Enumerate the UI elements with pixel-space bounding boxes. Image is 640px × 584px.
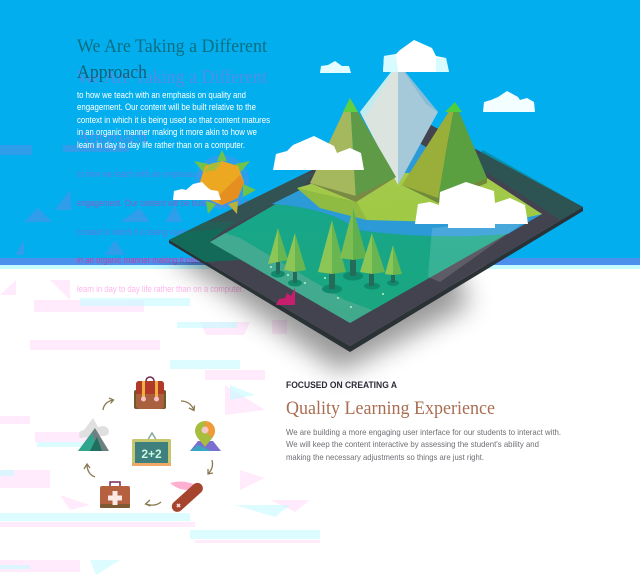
cloud: large bbox=[415, 182, 528, 228]
tablet screen bbox=[210, 132, 542, 323]
tree 5 bbox=[360, 233, 385, 290]
ghost heading and body text: in an organic manner making it more akin to how we bbox=[77, 255, 257, 265]
mountain: central peak bbox=[360, 63, 438, 185]
icon: map pin bbox=[190, 421, 221, 451]
ground island bbox=[297, 170, 542, 222]
section paragraph: making the necessary adjustments so things are just right. bbox=[286, 452, 484, 462]
ghost heading and body text: context in which it is being used so that content matures bbox=[77, 227, 270, 237]
section heading: Quality Learning Experience bbox=[286, 398, 495, 419]
ghost heading and body text: to how we teach with an emphasis on quality bbox=[77, 169, 232, 179]
heading: We Are Taking a Different bbox=[77, 36, 268, 57]
trees bbox=[268, 208, 402, 294]
ghost heading and body text: Approach bbox=[77, 127, 147, 148]
heading bbox=[77, 36, 268, 83]
tablet body bbox=[169, 118, 583, 352]
intro paragraph: learn in day to day life rather than on a computer. bbox=[77, 140, 245, 150]
intro paragraph: context in which it is being used so that content matures bbox=[77, 115, 270, 125]
cloud: right bbox=[483, 91, 535, 112]
icon: chalkboard: 2+2 bbox=[141, 447, 162, 461]
mountain: right peak bbox=[402, 102, 487, 203]
sparkle dots bbox=[270, 266, 384, 308]
cloud: small bbox=[320, 61, 351, 73]
blue background bbox=[0, 0, 640, 269]
icon: first aid kit bbox=[100, 482, 130, 508]
compression artefacts bbox=[0, 145, 320, 575]
ghost heading and body text bbox=[77, 67, 270, 294]
mountain: left peak bbox=[310, 98, 396, 202]
heading: Approach bbox=[77, 62, 147, 83]
intro paragraph: to how we teach with an emphasis on quality and bbox=[77, 90, 246, 100]
cloud by sun bbox=[173, 182, 221, 200]
eyebrow: FOCUSED ON CREATING A bbox=[286, 380, 397, 390]
intro paragraph: engagement. Our content will be built relative to the bbox=[77, 102, 256, 112]
illustration: floating tablet landscape bbox=[165, 63, 583, 372]
ghost heading and body text: learn in day to day life rather than on a computer. bbox=[77, 284, 244, 294]
ghost heading and body text: We Are Taking a Different bbox=[77, 67, 268, 88]
cloud: top bbox=[383, 40, 449, 72]
tree 2 bbox=[284, 233, 306, 286]
icon: sun bbox=[193, 150, 256, 214]
section paragraph bbox=[286, 427, 561, 462]
tree 3 bbox=[318, 220, 346, 294]
section: quality learning experience bbox=[286, 380, 561, 462]
learning cycle diagram bbox=[78, 377, 221, 514]
icon: mountain bbox=[78, 418, 109, 451]
pink artefact on bezel bbox=[276, 288, 295, 305]
tree 4 bbox=[340, 208, 367, 280]
tree 1 bbox=[268, 228, 288, 278]
ghost heading and body text: engagement. Our content will be built relative to the bbox=[77, 198, 255, 208]
intro paragraph bbox=[77, 90, 270, 150]
tree 6 bbox=[385, 245, 402, 286]
section paragraph: We will keep the content interactive by assessing the student's ability and bbox=[286, 439, 539, 449]
icon: chalkboard bbox=[132, 433, 171, 466]
section paragraph: We are building a more engaging user interface for our students to interact with. bbox=[286, 427, 561, 437]
tablet shadow bbox=[163, 262, 481, 384]
icon: pocket knife bbox=[170, 481, 205, 514]
intro paragraph: in an organic manner making it more akin to how we bbox=[77, 127, 257, 137]
cloud: middle bbox=[273, 136, 364, 170]
icon: backpack bbox=[134, 377, 166, 409]
arrows between icons bbox=[84, 398, 213, 506]
